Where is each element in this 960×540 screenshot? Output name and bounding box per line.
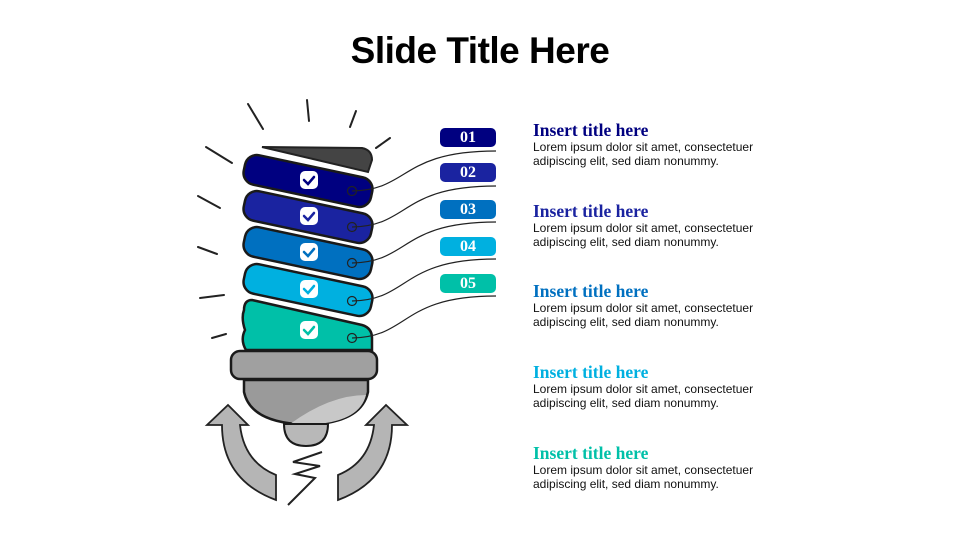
checks [300,171,318,339]
item 1: adipiscing elit, sed diam nonummy. [533,154,719,168]
item 3: Insert title here [533,281,648,301]
item 5: Lorem ipsum dolor sit amet, consectetuer [533,463,753,477]
badges [440,128,496,293]
item 5: Insert title here [533,443,648,463]
item 2 [533,201,753,248]
item 1: Lorem ipsum dolor sit amet, consectetuer [533,140,753,154]
item 3: Lorem ipsum dolor sit amet, consectetuer [533,301,753,315]
badges: 02 [460,164,476,181]
badges: 01 [460,129,476,146]
rays [198,100,390,338]
title: Slide Title Here [351,30,609,71]
item 4 [533,362,753,410]
item 2: adipiscing elit, sed diam nonummy. [533,234,719,248]
base [231,351,377,379]
arrows [207,405,407,500]
item 4: Insert title here [533,362,648,382]
item 1: Insert title here [533,120,648,140]
item 2: Insert title here [533,201,648,221]
bands [241,153,375,350]
item 5 [533,443,753,490]
connectors [348,151,496,342]
badges: 04 [460,238,476,255]
item 4: adipiscing elit, sed diam nonummy. [533,396,719,410]
badges: 05 [460,275,476,292]
item 5: adipiscing elit, sed diam nonummy. [533,476,719,490]
top cap [262,147,372,172]
item 3: adipiscing elit, sed diam nonummy. [533,314,719,328]
item 4: Lorem ipsum dolor sit amet, consectetuer [533,382,753,396]
item 1 [533,120,753,168]
item 3 [533,281,753,328]
item 2: Lorem ipsum dolor sit amet, consectetuer [533,221,753,235]
badges: 03 [460,201,476,218]
